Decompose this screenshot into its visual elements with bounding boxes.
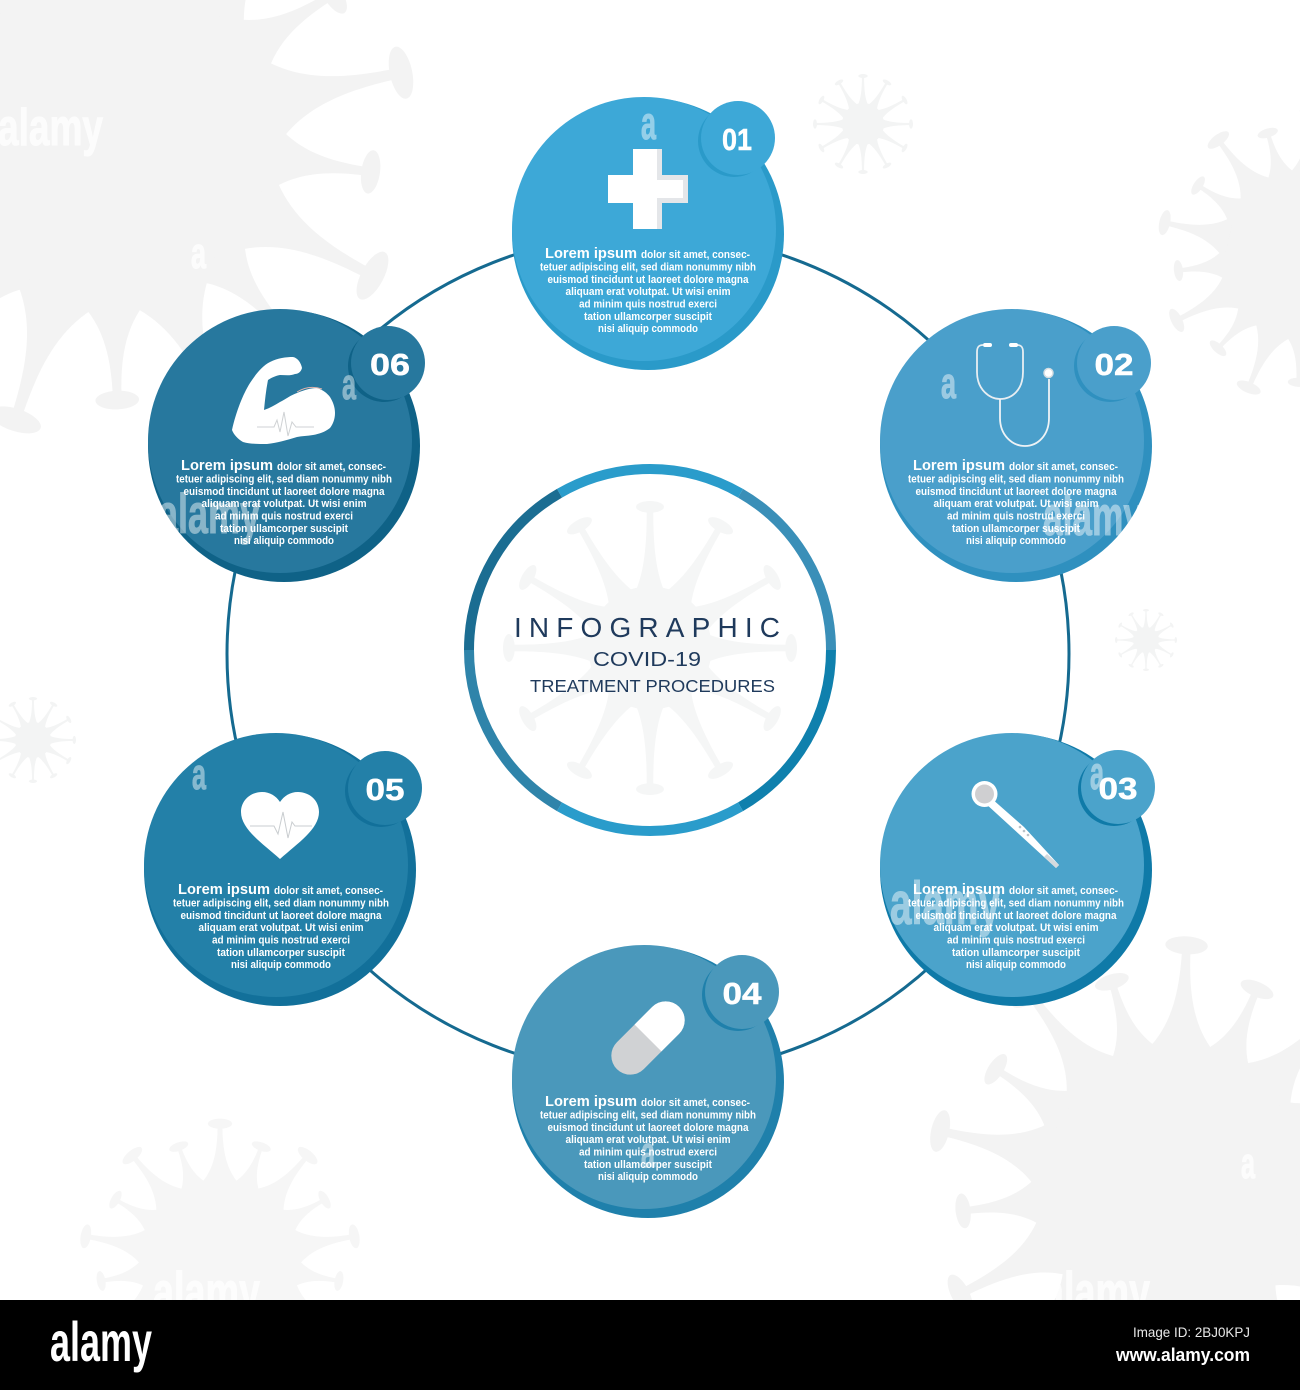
text block: ad minim quis nostrud exerci <box>947 510 1085 522</box>
footer bar: alamy <box>50 1310 152 1373</box>
disc <box>880 734 1152 1006</box>
panel: 05 heart <box>144 733 422 1006</box>
background virus: small top <box>813 74 913 174</box>
watermark: bottom left: alamy <box>153 1260 260 1323</box>
text block: Lorem ipsum <box>545 1093 637 1110</box>
disc <box>880 310 1152 582</box>
watermark: a <box>641 1128 655 1177</box>
icon: thermometer <box>972 781 1059 868</box>
text block: Lorem ipsum <box>913 457 1005 474</box>
text block: ad minim quis nostrud exerci <box>579 298 717 310</box>
background virus: top left <box>0 0 433 454</box>
text block: dolor sit amet, consec- <box>1009 885 1118 897</box>
text block: tetuer adipiscing elit, sed diam nonummy nibh <box>908 474 1124 486</box>
text block: dolor sit amet, consec- <box>641 249 750 261</box>
footer bar: www.alamy.com <box>1115 1345 1250 1365</box>
panel: 06 muscle <box>148 309 425 582</box>
connecting ring <box>227 233 1069 1075</box>
disc <box>144 734 416 1006</box>
disc <box>512 98 784 370</box>
footer bar: Image ID: 2BJ0KPJ <box>1133 1324 1250 1340</box>
background virus: small right <box>1115 609 1177 671</box>
text block: euismod tincidunt ut laoreet dolore magna <box>184 486 385 498</box>
text block <box>176 457 392 547</box>
text block: dolor sit amet, consec- <box>641 1097 750 1109</box>
text block: aliquam erat volutpat. Ut wisi enim <box>934 498 1098 510</box>
watermark: a <box>192 750 206 799</box>
text block: tetuer adipiscing elit, sed diam nonummy nibh <box>540 1110 756 1122</box>
center disc <box>469 469 831 831</box>
text block <box>540 1093 756 1183</box>
watermark: alamy <box>1043 484 1143 547</box>
center panel <box>469 469 831 831</box>
text block: aliquam erat volutpat. Ut wisi enim <box>566 1134 730 1146</box>
text block: ad minim quis nostrud exerci <box>579 1146 717 1158</box>
text block: nisi aliquip commodo <box>231 959 331 971</box>
badge 04: 04 <box>722 976 762 1011</box>
badge 06 <box>348 326 425 402</box>
center ring <box>469 469 831 831</box>
text block: tetuer adipiscing elit, sed diam nonummy nibh <box>540 262 756 274</box>
background virus: bottom right <box>910 923 1300 1390</box>
text block: nisi aliquip commodo <box>966 959 1066 971</box>
text block: tetuer adipiscing elit, sed diam nonummy nibh <box>908 898 1124 910</box>
text block: tation ullamcorper suscipit <box>952 947 1080 959</box>
text block: tation ullamcorper suscipit <box>584 311 712 323</box>
subtitle: covid: COVID-19 <box>593 649 701 671</box>
text block: tation ullamcorper suscipit <box>584 1159 712 1171</box>
badge 01: 01 <box>722 122 752 157</box>
icon: heart <box>241 792 319 859</box>
background virus: small left <box>0 697 76 783</box>
watermark: top left a: a <box>191 229 206 278</box>
panel: 03 thermometer <box>880 733 1155 1006</box>
watermark: a <box>1090 747 1104 799</box>
text block: aliquam erat volutpat. Ut wisi enim <box>202 498 366 510</box>
center virus <box>503 501 797 795</box>
watermark: bottom right: alamy <box>1043 1260 1150 1323</box>
watermark: a <box>941 359 956 408</box>
text block: Lorem ipsum <box>178 881 270 898</box>
text block <box>908 457 1124 547</box>
text block: ad minim quis nostrud exerci <box>215 510 353 522</box>
text block: nisi aliquip commodo <box>598 323 698 335</box>
badge 03: 03 <box>1098 771 1138 806</box>
badge 01 <box>698 101 775 177</box>
text block: nisi aliquip commodo <box>598 1171 698 1183</box>
badge 05 <box>345 751 422 827</box>
text block: Lorem ipsum <box>181 457 273 474</box>
text block: tation ullamcorper suscipit <box>217 947 345 959</box>
text block: euismod tincidunt ut laoreet dolore magna <box>548 274 749 286</box>
text block: dolor sit amet, consec- <box>277 461 386 473</box>
title: INFOGRAPHIC <box>514 612 780 643</box>
text block: euismod tincidunt ut laoreet dolore magna <box>180 910 382 922</box>
icon: stethoscope <box>977 343 1053 446</box>
text block: nisi aliquip commodo <box>234 535 334 547</box>
text block: tetuer adipiscing elit, sed diam nonummy nibh <box>176 474 392 486</box>
text block: nisi aliquip commodo <box>966 535 1066 547</box>
icon: cross <box>608 149 688 229</box>
badge 05: 05 <box>366 772 404 807</box>
watermark: a <box>641 97 656 149</box>
text block: aliquam erat volutpat. Ut wisi enim <box>934 922 1098 934</box>
icon: pill <box>603 993 693 1083</box>
text block: Lorem ipsum <box>913 881 1005 898</box>
text block: tation ullamcorper suscipit <box>220 523 348 535</box>
text block: dolor sit amet, consec- <box>274 885 383 897</box>
text block: aliquam erat volutpat. Ut wisi enim <box>566 286 730 298</box>
badge 02 <box>1074 326 1151 402</box>
subtitle: treatment procedures: TREATMENT PROCEDURES <box>530 676 775 696</box>
text block: euismod tincidunt ut laoreet dolore magna <box>916 910 1117 922</box>
disc <box>148 310 420 582</box>
background virus: top right <box>1146 98 1300 411</box>
panel: 04 pill <box>512 945 784 1218</box>
text block: tetuer adipiscing elit, sed diam nonummy nibh <box>173 898 389 910</box>
text block: aliquam erat volutpat. Ut wisi enim <box>198 922 364 934</box>
watermark: alamy <box>890 870 1000 937</box>
icon: muscle <box>232 357 335 444</box>
text block <box>540 245 756 335</box>
text block: euismod tincidunt ut laoreet dolore magna <box>916 486 1117 498</box>
background virus: bottom left <box>77 1119 363 1390</box>
badge 04 <box>702 955 779 1031</box>
panel: 02 stethoscope <box>880 309 1152 582</box>
panel: 01 medical cross <box>512 97 784 370</box>
watermark: bottom right a: a <box>1241 1139 1255 1188</box>
footer bar <box>0 1300 1300 1390</box>
watermark: alamy <box>158 482 260 545</box>
watermark: top left: alamy <box>0 99 103 157</box>
text block: tation ullamcorper suscipit <box>952 523 1080 535</box>
text block: ad minim quis nostrud exerci <box>947 934 1085 946</box>
disc <box>512 946 784 1218</box>
badge 03 <box>1078 750 1155 826</box>
watermark: a <box>342 360 356 409</box>
text block: euismod tincidunt ut laoreet dolore magna <box>548 1122 749 1134</box>
text block <box>908 881 1124 971</box>
text block: dolor sit amet, consec- <box>1009 461 1118 473</box>
badge 02: 02 <box>1094 347 1134 382</box>
text block: Lorem ipsum <box>545 245 637 262</box>
text block <box>173 881 389 971</box>
text block: ad minim quis nostrud exerci <box>212 934 350 946</box>
badge 06: 06 <box>370 347 410 382</box>
